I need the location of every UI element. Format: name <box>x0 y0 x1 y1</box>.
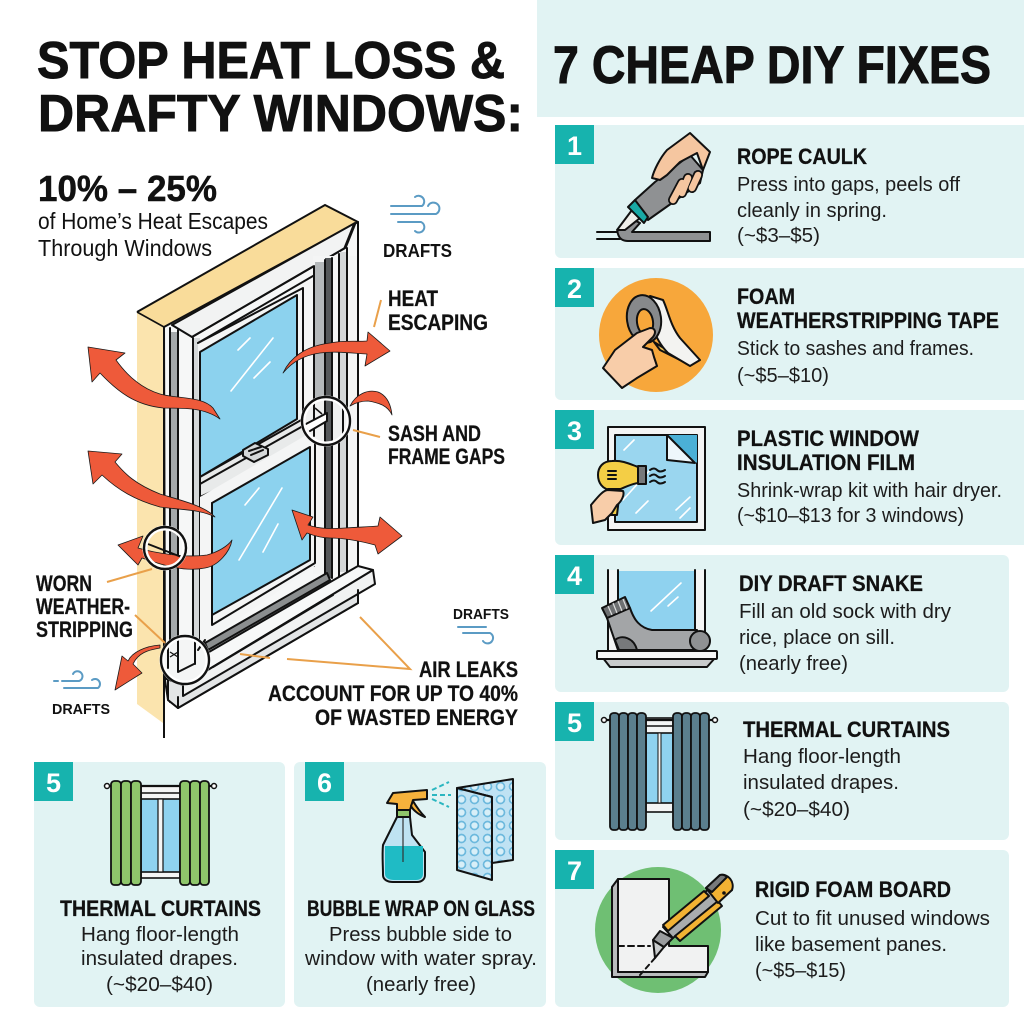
panel: bottom thermal curtains <box>34 762 285 1007</box>
text: bottom thermal curtains: THERMAL CURTAINS <box>60 896 261 921</box>
text: bottom thermal curtains: Hang floor-length <box>81 923 239 946</box>
arrow: lower left <box>118 536 232 569</box>
label: air leaks <box>268 657 518 730</box>
badge 7 <box>555 850 594 889</box>
icon: sock on window sill <box>597 570 717 667</box>
title: DRAFTY WINDOWS: <box>38 85 523 143</box>
badge 5: 5 <box>46 768 61 798</box>
text: diy draft snake <box>739 571 952 675</box>
icon: folded bubble wrap <box>457 779 513 880</box>
callout leader lines <box>107 300 410 669</box>
panel: fix 6 bubble wrap on glass <box>294 762 546 1007</box>
text: rope caulk <box>737 144 960 247</box>
panel: fix 3 plastic window insulation film <box>555 410 1024 545</box>
label: sash and frame gaps <box>388 421 505 469</box>
text: diy draft snake: rice, place on sill. <box>739 626 895 649</box>
text: foam weatherstripping tape: Stick to sashes and frames. <box>737 337 974 360</box>
text: rope caulk: (~$3–$5) <box>737 224 820 247</box>
text: foam weatherstripping tape: FOAM <box>737 284 795 309</box>
lower sash <box>200 430 315 660</box>
text: bottom thermal curtains: (~$20–$40) <box>106 973 213 996</box>
icon: drafts wind top <box>391 196 439 233</box>
panel: fix 7 rigid foam board <box>555 850 1009 1007</box>
text: rigid foam board: like basement panes. <box>755 933 947 956</box>
badge 1: 1 <box>567 131 582 161</box>
icon: drafts wind bottom left <box>54 671 100 688</box>
icon: spray bottle <box>383 782 451 882</box>
label: air leaks: AIR LEAKS <box>419 657 518 682</box>
text: plastic window insulation film: Shrink-wrap kit with hair dryer. <box>737 479 1002 502</box>
badge 5 <box>555 702 594 741</box>
arrow: bottom left <box>115 645 160 690</box>
badge 4: 4 <box>567 561 582 591</box>
panel: fix 5 thermal curtains right <box>555 702 1009 840</box>
badge 6: 6 <box>317 768 332 798</box>
arrow: double headed <box>292 510 402 554</box>
weatherstripping band <box>205 573 330 650</box>
label: worn weatherstripping <box>36 571 133 642</box>
text: bubble wrap on glass <box>304 896 537 996</box>
window illustration <box>137 205 375 738</box>
label: worn weatherstripping: STRIPPING <box>36 617 133 642</box>
title: STOP HEAT LOSS & <box>37 32 505 90</box>
circle: sash and frame gap <box>302 397 350 445</box>
statistic: heat escaping through windows: 10% – 25% <box>38 168 217 209</box>
window frame <box>164 222 358 708</box>
arrow: upper right <box>283 332 390 373</box>
icon: caulk gun and hand <box>597 133 710 241</box>
upper sash <box>198 280 313 497</box>
label: sash and frame gaps: SASH AND <box>388 421 481 446</box>
text: diy draft snake: (nearly free) <box>739 652 848 675</box>
badge 7: 7 <box>567 856 582 886</box>
label: heat escaping <box>388 286 488 335</box>
icon: green curtains <box>104 781 216 885</box>
text: rope caulk: Press into gaps, peels off <box>737 173 960 196</box>
badge 5 <box>34 762 73 801</box>
text: plastic window insulation film: INSULATION FILM <box>737 450 915 475</box>
header panel: 7 cheap DIY fixes <box>537 0 1024 117</box>
circle: worn weatherstripping top <box>144 527 186 569</box>
label: worn weatherstripping: WORN <box>36 571 92 596</box>
wall <box>137 205 358 738</box>
text: rope caulk: cleanly in spring. <box>737 199 887 222</box>
text: bubble wrap on glass: BUBBLE WRAP ON GLASS <box>307 896 535 921</box>
text: rigid foam board: (~$5–$15) <box>755 959 846 982</box>
statistic: heat escaping through windows <box>38 168 268 261</box>
text: rigid foam board <box>755 877 990 982</box>
label: drafts bottom left: DRAFTS <box>52 701 110 718</box>
icon: foam board and utility knife <box>595 867 733 993</box>
circle: worn weatherstripping bottom <box>161 636 209 684</box>
label: heat escaping: HEAT <box>388 286 438 311</box>
text: thermal curtains right: (~$20–$40) <box>743 798 850 821</box>
text: bottom thermal curtains: insulated drapes. <box>81 947 238 970</box>
badge 5: 5 <box>567 708 582 738</box>
window sill <box>164 566 375 708</box>
badge 2: 2 <box>567 274 582 304</box>
text: rigid foam board: Cut to fit unused windows <box>755 907 990 930</box>
icon: tape roll and hand <box>599 278 713 392</box>
badge 1 <box>555 125 594 164</box>
label: drafts right: DRAFTS <box>453 606 509 623</box>
text: diy draft snake: DIY DRAFT SNAKE <box>739 571 923 596</box>
label: sash and frame gaps: FRAME GAPS <box>388 444 505 469</box>
text: plastic window insulation film: (~$10–$13 for 3 windows) <box>737 504 964 527</box>
text: thermal curtains right <box>743 717 950 821</box>
title <box>37 32 523 143</box>
icon: window film and hair dryer <box>591 427 705 530</box>
panel: fix 2 foam weatherstripping tape <box>555 268 1024 400</box>
text: bubble wrap on glass: (nearly free) <box>366 973 476 996</box>
text: bottom thermal curtains <box>60 896 261 996</box>
text: thermal curtains right: THERMAL CURTAINS <box>743 717 950 742</box>
label: air leaks: ACCOUNT FOR UP TO 40% <box>268 681 518 706</box>
badge 6 <box>305 762 344 801</box>
statistic: heat escaping through windows: Through Windows <box>38 235 212 261</box>
arrow: middle left <box>88 451 215 517</box>
text: rope caulk: ROPE CAULK <box>737 144 867 169</box>
label: heat escaping: ESCAPING <box>388 310 488 335</box>
text: plastic window insulation film <box>737 426 1002 527</box>
text: bubble wrap on glass: Press bubble side to <box>329 923 512 946</box>
panel: fix 4 diy draft snake <box>555 555 1009 692</box>
text: plastic window insulation film: PLASTIC WINDOW <box>737 426 919 451</box>
arrow: upper left <box>88 347 220 419</box>
icon: dark curtains <box>602 713 718 830</box>
badge 3: 3 <box>567 416 582 446</box>
text: foam weatherstripping tape: (~$5–$10) <box>737 364 829 387</box>
badge 3 <box>555 410 594 449</box>
badge 2 <box>555 268 594 307</box>
text: diy draft snake: Fill an old sock with dry <box>739 600 952 623</box>
text: foam weatherstripping tape <box>737 284 999 387</box>
text: rigid foam board: RIGID FOAM BOARD <box>755 877 951 902</box>
meeting rail and latch <box>200 419 313 497</box>
icon: drafts wind right <box>458 627 493 643</box>
text: bubble wrap on glass: window with water spray. <box>304 947 537 970</box>
text: foam weatherstripping tape: WEATHERSTRIPPING TAPE <box>737 308 999 333</box>
text: thermal curtains right: insulated drapes. <box>743 771 899 794</box>
text: thermal curtains right: Hang floor-length <box>743 745 901 768</box>
statistic: heat escaping through windows: of Home’s Heat Escapes <box>38 208 268 234</box>
badge 4 <box>555 555 594 594</box>
label: air leaks: OF WASTED ENERGY <box>315 705 518 730</box>
arrow: small gap draft <box>350 391 392 415</box>
panel: fix 1 rope caulk <box>555 125 1024 258</box>
gap inspection circles <box>144 397 350 684</box>
label: drafts top: DRAFTS <box>383 241 452 261</box>
heat arrows <box>88 332 402 690</box>
label: worn weatherstripping: WEATHER- <box>36 594 130 619</box>
